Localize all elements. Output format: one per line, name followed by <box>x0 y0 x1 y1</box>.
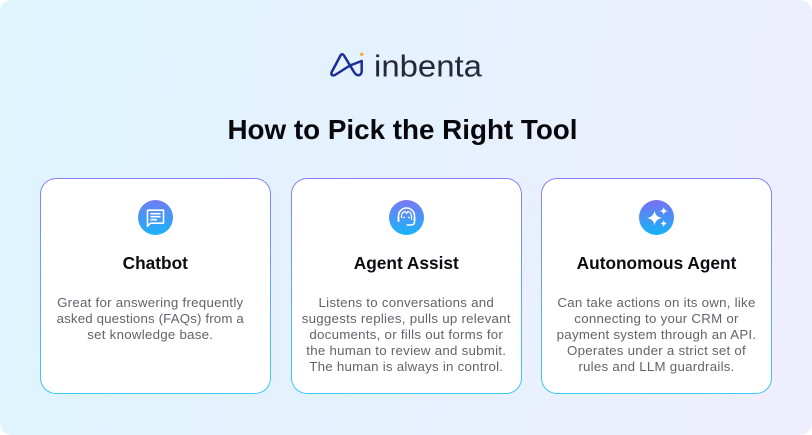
text block: suggests replies, pulls up relevant <box>302 311 511 326</box>
text block <box>557 295 756 374</box>
panel: autonomous agent <box>541 178 772 394</box>
text block: Can take actions on its own, like <box>557 295 756 310</box>
text block: documents, or fills out forms for <box>309 327 503 342</box>
heading: Chatbot <box>123 253 188 273</box>
text block: Listens to conversations and <box>318 295 494 310</box>
text block: Great for answering frequently <box>57 295 243 310</box>
icon: sparkles <box>639 200 674 235</box>
text block: payment system through an API. <box>557 327 756 342</box>
text block <box>57 295 244 342</box>
title: How to Pick the Right Tool <box>227 114 578 145</box>
panel: agent assist <box>291 178 522 394</box>
logo: inbenta <box>330 50 483 80</box>
text block <box>302 295 511 374</box>
text block: connecting to your CRM or <box>574 311 739 326</box>
panel: chatbot <box>40 178 270 394</box>
text block: set knowledge base. <box>87 327 213 342</box>
heading: Agent Assist <box>354 253 459 273</box>
text block: the human to review and submit. <box>306 343 506 358</box>
text block: The human is always in control. <box>309 359 503 374</box>
text block: rules and LLM guardrails. <box>578 359 735 374</box>
text block: asked questions (FAQs) from a <box>57 311 244 326</box>
heading: Autonomous Agent <box>577 253 736 273</box>
icon: chat bubble <box>138 200 173 235</box>
text block: Operates under a strict set of <box>567 343 746 358</box>
icon: headset <box>389 200 424 235</box>
